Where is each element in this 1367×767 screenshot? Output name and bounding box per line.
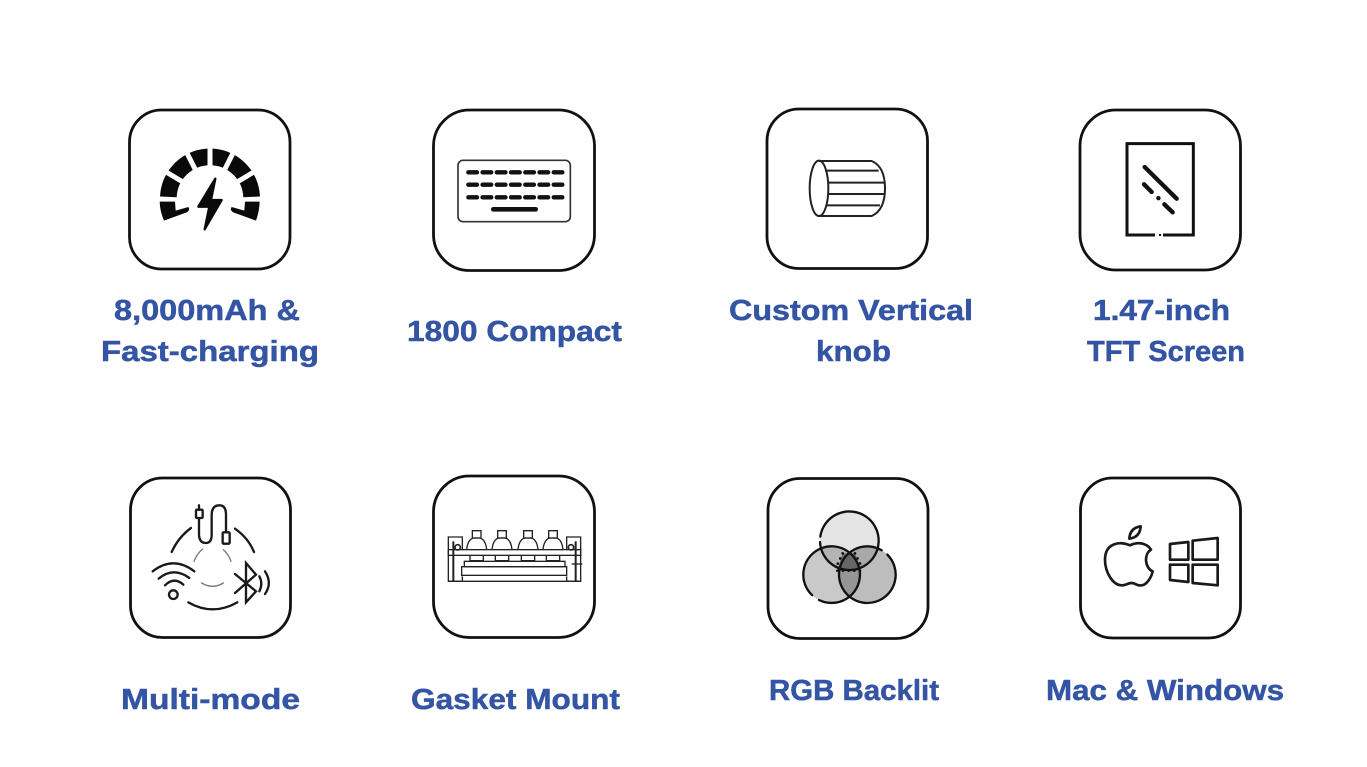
label: Custom Vertical knob <box>729 295 973 368</box>
feature: multi-mode connectivity <box>121 478 300 716</box>
icon card: overlapping colour circles <box>768 478 928 638</box>
label: Custom Vertical knob: Custom Vertical <box>729 295 973 327</box>
icon card: knob <box>767 109 928 268</box>
feature: vertical knob <box>729 109 973 368</box>
label: 1.47-inch TFT Screen: 1.47-inch <box>1093 295 1230 327</box>
feature: TFT screen <box>1080 110 1245 368</box>
label: 8,000mAh & Fast-charging <box>101 295 319 368</box>
label: 1.47-inch TFT Screen <box>1087 295 1245 368</box>
icon card: keyboard <box>434 110 594 270</box>
icon card: cable, wifi and bluetooth <box>130 478 290 638</box>
label: Mac & Windows: Mac & Windows <box>1046 675 1284 707</box>
feature: gasket mount <box>411 476 620 716</box>
label: 8,000mAh & Fast-charging: Fast-charging <box>101 336 319 368</box>
icon card: gauge with lightning bolt <box>130 110 290 269</box>
label: Gasket Mount: Gasket Mount <box>411 684 620 716</box>
feature: Mac and Windows support <box>1046 478 1284 707</box>
feature: battery and fast charging <box>101 110 319 368</box>
label: 1.47-inch TFT Screen: TFT Screen <box>1087 336 1245 368</box>
label: 1800 Compact: 1800 Compact <box>407 316 622 348</box>
label: RGB Backlit: RGB Backlit <box>769 675 939 707</box>
feature: RGB backlight <box>768 478 939 707</box>
feature: compact layout <box>407 110 622 348</box>
label: Multi-mode: Multi-mode <box>121 684 300 716</box>
icon card: gasket cross-section <box>434 476 594 638</box>
label: Custom Vertical knob: knob <box>816 336 891 368</box>
icon card: apple and windows logos <box>1080 478 1240 638</box>
label: 8,000mAh & Fast-charging: 8,000mAh & <box>114 295 300 327</box>
icon card: screen <box>1080 110 1240 270</box>
